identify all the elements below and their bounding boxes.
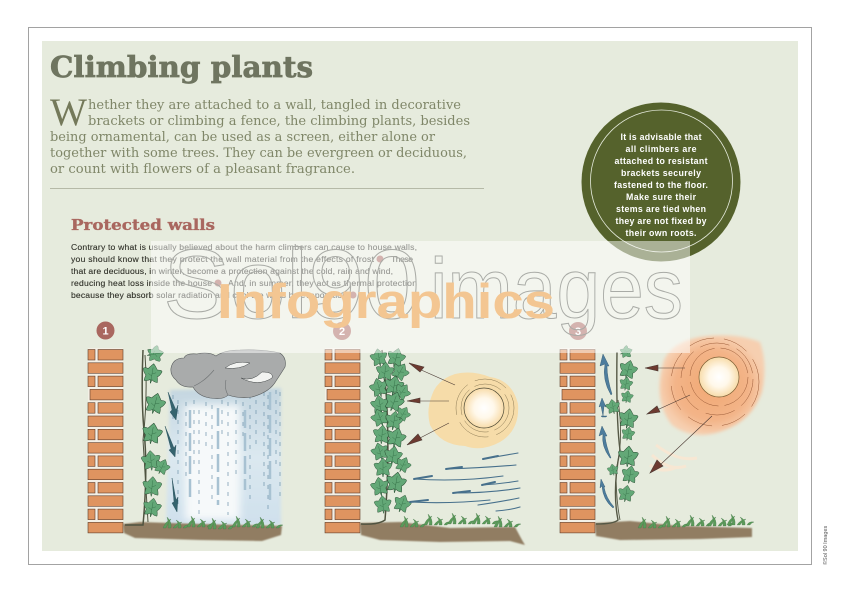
callout text: they are not fixed by [616,216,707,226]
vine 1 [125,345,172,525]
section body text: These [391,254,413,264]
callout text: stems are tied when [616,204,706,214]
watermark logo: Infographics [217,275,555,329]
intro text: being ornamental, can be used as a screen, either alone or [50,130,436,145]
brick wall 1 [88,348,123,533]
section heading: Protected walls [71,216,215,234]
section body text: you should know that they protect the wall material from the effects of frost [71,254,375,264]
badge 1 [96,322,114,340]
intro text: hether they are attached to a wall, tangled in decorative [88,98,461,113]
drop cap: W [50,91,87,134]
inline markers [214,256,384,298]
badge 2 [333,322,351,340]
intro text: together with some trees. They can be evergreen or deciduous, [50,146,467,161]
brick wall 2 [325,348,360,533]
section body text: reducing heat loss inside the house [71,278,212,288]
intro text: or count with flowers of a pleasant fragrance. [50,162,355,177]
storm cloud [171,350,285,399]
watermark logo [163,229,683,339]
title: Climbing plants [50,50,313,84]
illustration 2: sun and wind blocked [325,346,525,545]
watermark band [151,241,690,353]
brick wall 3 [560,348,595,533]
badge 3: 3 [575,326,581,338]
grass 1 [163,516,283,529]
grass 3 [638,514,754,528]
credit: ©Sol 90 Images [822,526,829,565]
ground 3 [595,521,752,540]
badge 1: 1 [102,326,109,338]
intro text: brackets or climbing a fence, the climbing plants, besides [88,114,470,129]
vine 3 [596,344,640,524]
sun 2 [428,373,518,448]
rain curtain [166,388,281,525]
badge 2: 2 [339,326,345,338]
callout text: fastened to the floor. [614,180,708,190]
callout text: attached to resistant [614,156,708,166]
watermark logo: Sol90 [163,229,420,339]
dense ivy [361,346,414,524]
watermark logo: images [430,242,683,337]
callout circle [582,102,740,262]
wind lines [410,453,520,511]
illustration 1: wall protected from rain [88,345,285,541]
green panel [42,41,798,551]
ground 1 [123,522,282,541]
callout text: It is advisable that [620,132,702,142]
heat arrows 3 [645,365,712,473]
callout text: their own roots. [626,228,696,238]
rising air arrows [599,354,614,508]
section body text: Contrary to what is usually believed about the harm climbers can cause to house walls, [71,242,417,252]
section body text: because they absorb solar radiation and cool the walls by evaporation [71,290,347,300]
callout text [614,132,708,238]
callout text: all climbers are [626,144,697,154]
intro text [50,91,470,177]
illustration 3: evaporative cooling [560,335,765,540]
section body text: that are deciduous, in winter, become a protection against the cold, rain and wind, [71,266,393,276]
ground 2 [360,522,525,545]
callout text: brackets securely [621,168,701,178]
section body text [71,242,417,300]
grass 2 [400,513,521,527]
badge 3 [569,322,587,340]
rain deflection arrows [165,392,178,512]
sun 3 [650,335,765,470]
callout text: Make sure their [626,192,697,202]
section body text: And, in summer, they act as thermal protection [228,278,417,288]
heat arrows 2 [407,363,455,445]
